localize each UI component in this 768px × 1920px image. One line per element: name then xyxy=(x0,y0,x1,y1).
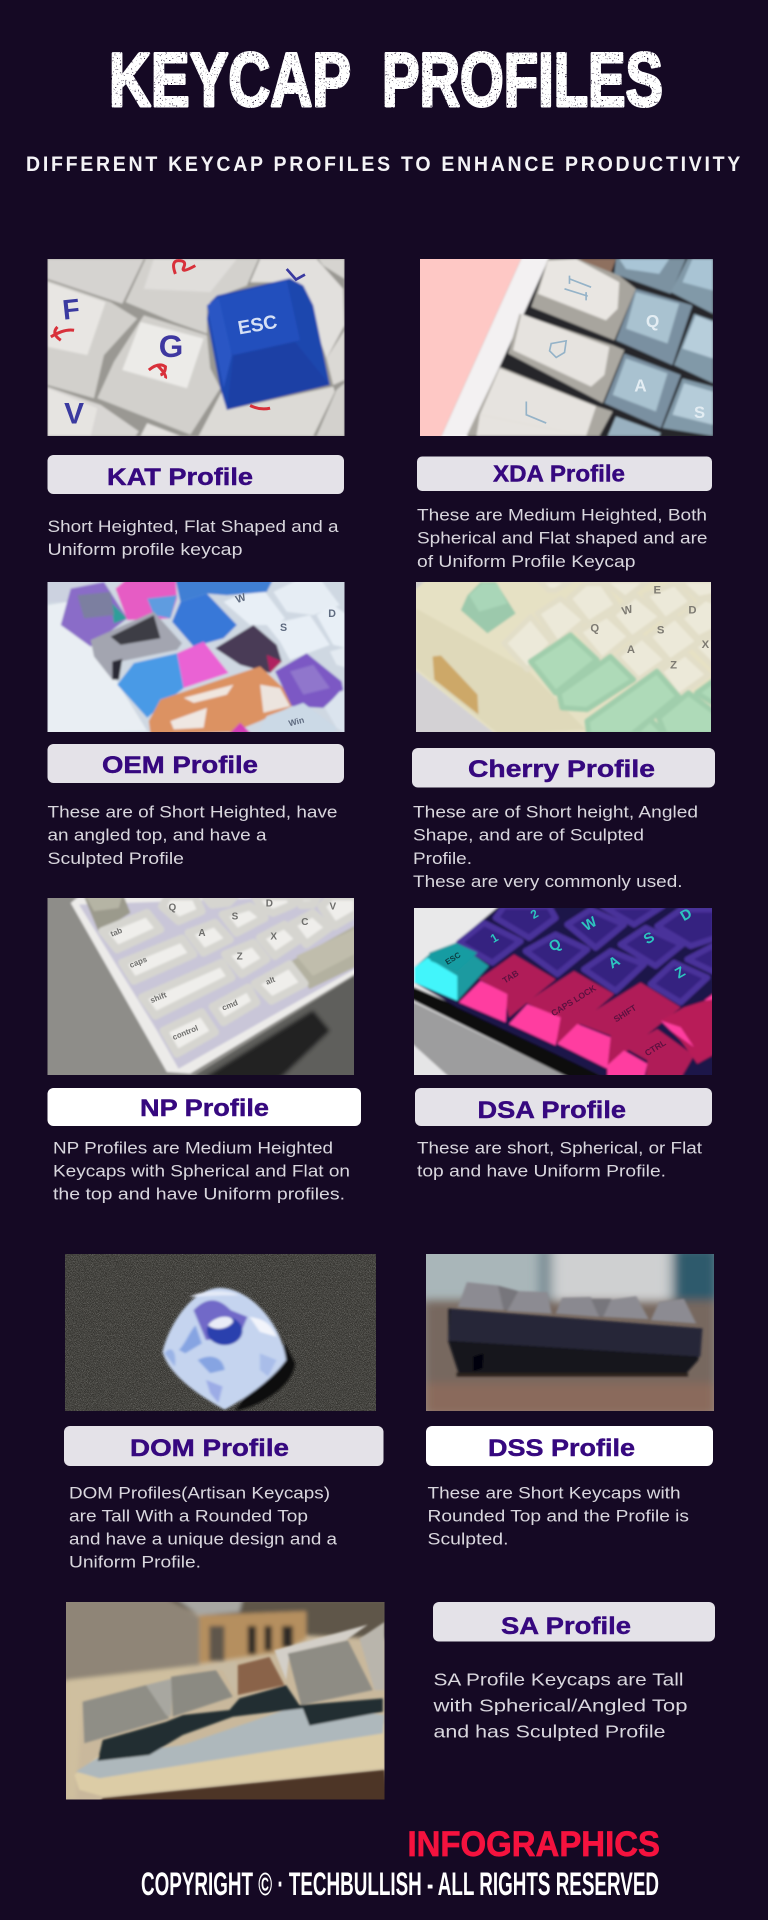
heading: KAT: KAT Profile xyxy=(107,464,253,491)
key legends: Q xyxy=(546,936,564,956)
key legends: V xyxy=(329,902,336,913)
photo: DSS keyboard side view xyxy=(426,1254,714,1411)
key legends: C xyxy=(301,917,308,928)
description: NP: Keycaps with Spherical and Flat on xyxy=(53,1163,350,1181)
key legends: S xyxy=(280,622,287,634)
heading: DSA: DSA Profile xyxy=(478,1097,626,1124)
description: OEM: an angled top, and have a xyxy=(48,826,267,844)
label bar: XDA xyxy=(417,456,712,491)
key legends: A xyxy=(198,928,206,939)
description: KAT xyxy=(48,518,339,559)
key legends: 2 xyxy=(528,906,541,922)
description: NP: the top and have Uniform profiles. xyxy=(53,1186,345,1204)
label bar: NP xyxy=(48,1088,361,1126)
key legends: 1 xyxy=(488,930,501,946)
panel: OEM profile xyxy=(44,579,350,868)
key legends: A xyxy=(606,953,623,972)
heading: SA: SA Profile xyxy=(501,1613,631,1640)
key legends: shift xyxy=(149,990,168,1005)
description: Cherry: These are very commonly used. xyxy=(413,873,682,891)
key legends: S xyxy=(694,403,705,422)
key legends: caps xyxy=(128,954,149,970)
key legends xyxy=(590,585,710,672)
description: DSS: Sculpted. xyxy=(428,1530,508,1548)
heading: XDA: XDA Profile xyxy=(493,460,625,486)
description: Cherry: Shape, and are of Sculpted xyxy=(413,826,644,844)
description: SA xyxy=(432,1670,688,1742)
key legends: W xyxy=(580,914,600,935)
key legends: W xyxy=(621,604,634,618)
heading: NP: NP Profile xyxy=(140,1095,269,1122)
key legends xyxy=(526,276,705,423)
photo: Cherry retro keyboard xyxy=(416,582,711,732)
description: XDA: These are Medium Heighted, Both xyxy=(417,506,707,524)
panel: XDA profile xyxy=(417,256,716,571)
photo: KAT keycaps with blue ESC key xyxy=(48,259,344,436)
key legends: Z xyxy=(670,660,677,672)
label bar: KAT xyxy=(48,455,344,494)
title xyxy=(109,38,663,123)
label bar: DOM xyxy=(64,1426,384,1466)
key legends: cmd xyxy=(221,998,239,1013)
key legends xyxy=(109,898,336,1042)
key legends: control xyxy=(171,1024,199,1042)
key legends: D xyxy=(266,898,273,909)
label bar: Cherry xyxy=(412,748,715,788)
key legends: TAB xyxy=(501,968,520,985)
key legends: SHIFT xyxy=(612,1002,639,1024)
key legends: A xyxy=(627,644,635,656)
key legends: G xyxy=(159,328,183,364)
description: OEM: These are of Short Heighted, have xyxy=(48,804,338,822)
description: XDA xyxy=(417,506,708,571)
key legends: F xyxy=(61,292,81,326)
label bar: OEM xyxy=(48,744,344,783)
key legends: Z xyxy=(672,964,688,982)
description: DSA xyxy=(417,1140,702,1181)
panel: NP profile xyxy=(44,895,361,1204)
panel: DOM profile xyxy=(63,1252,384,1572)
description: DOM xyxy=(69,1484,338,1572)
photo: NP white keyboard xyxy=(48,898,354,1075)
description: SA: with Spherical/Angled Top xyxy=(432,1696,688,1716)
description: Cherry: Profile. xyxy=(413,850,472,868)
heading: OEM: OEM Profile xyxy=(102,752,258,779)
key legends: D xyxy=(678,906,695,925)
key legends: alt xyxy=(264,975,277,987)
key legends: S xyxy=(657,624,665,636)
description: Cherry: These are of Short height, Angled xyxy=(413,804,698,822)
key legends: Q xyxy=(646,311,659,331)
photo: XDA keyboard on pink xyxy=(420,259,713,436)
photo: OEM artisan keycaps xyxy=(48,582,344,732)
panel: DSA profile xyxy=(411,905,717,1181)
description: SA: SA Profile Keycaps are Tall xyxy=(434,1670,684,1690)
description: Cherry xyxy=(413,804,698,891)
description: NP xyxy=(53,1140,350,1204)
title: PROFILES xyxy=(382,38,663,123)
key legends: V xyxy=(64,397,84,430)
key legends: X xyxy=(270,931,277,942)
key legends: Q xyxy=(169,903,177,914)
description: XDA: Spherical and Flat shaped and are xyxy=(417,530,708,548)
panel: KAT profile xyxy=(44,256,350,559)
key legends: S xyxy=(232,912,239,923)
key legends: CAPS LOCK xyxy=(549,983,598,1018)
description: KAT: Uniform profile keycap xyxy=(48,541,242,559)
panel: SA profile xyxy=(63,1599,715,1803)
title: KEYCAP xyxy=(109,38,351,123)
label bar: DSS xyxy=(426,1426,713,1466)
footer label: INFOGRAPHICS: INFOGRAPHICS xyxy=(408,1825,660,1864)
description: DOM: DOM Profiles(Artisan Keycaps) xyxy=(69,1484,330,1502)
key legends: X xyxy=(702,639,710,651)
key legends: D xyxy=(688,604,697,616)
key legends: ESC xyxy=(444,950,463,967)
label bar: SA xyxy=(433,1602,715,1642)
heading: DOM: DOM Profile xyxy=(130,1435,289,1462)
description: DOM: are Tall With a Rounded Top xyxy=(69,1508,308,1526)
photo: DOM artisan keycap xyxy=(65,1254,376,1411)
description: DSA: These are short, Spherical, or Flat xyxy=(417,1140,702,1158)
key legends: tab xyxy=(109,926,124,939)
description: XDA: of Uniform Profile Keycap xyxy=(417,553,636,571)
description: DSS: Rounded Top and the Profile is xyxy=(428,1508,689,1526)
description: SA: and has Sculpted Profile xyxy=(434,1722,666,1742)
key legends: S xyxy=(641,929,658,948)
description: DOM: Uniform Profile. xyxy=(69,1554,201,1572)
description: OEM xyxy=(48,804,338,868)
description: NP: NP Profiles are Medium Heighted xyxy=(53,1140,333,1158)
key legends: A xyxy=(634,376,647,396)
key legends: D xyxy=(328,608,336,620)
key legends: ESC xyxy=(236,312,279,339)
key legends: Q xyxy=(590,623,599,635)
description: KAT: Short Heighted, Flat Shaped and a xyxy=(48,518,339,536)
photo: SA keycaps close-up xyxy=(66,1602,384,1800)
photo: DSA purple and pink keyboard xyxy=(414,906,712,1075)
description: DSA: top and have Uniform Profile. xyxy=(417,1163,666,1181)
description: DSS: These are Short Keycaps with xyxy=(428,1484,680,1502)
heading: Cherry: Cherry Profile xyxy=(468,756,655,783)
key legends xyxy=(444,906,695,1058)
key legends: W xyxy=(234,591,248,606)
description: OEM: Sculpted Profile xyxy=(48,850,184,868)
key legends: Z xyxy=(237,951,243,962)
panel: Cherry profile xyxy=(412,579,715,891)
description: DSS xyxy=(428,1484,689,1548)
heading: DSS: DSS Profile xyxy=(488,1435,635,1462)
panel: DSS profile xyxy=(421,1247,719,1548)
label bar: DSA xyxy=(415,1088,712,1126)
key legends: CTRL xyxy=(643,1038,668,1058)
key legends: Win xyxy=(287,715,305,728)
key legends: E xyxy=(654,585,662,597)
key legends xyxy=(234,591,336,728)
description: DOM: and have a unique design and a xyxy=(69,1530,338,1548)
key legends xyxy=(51,261,305,430)
